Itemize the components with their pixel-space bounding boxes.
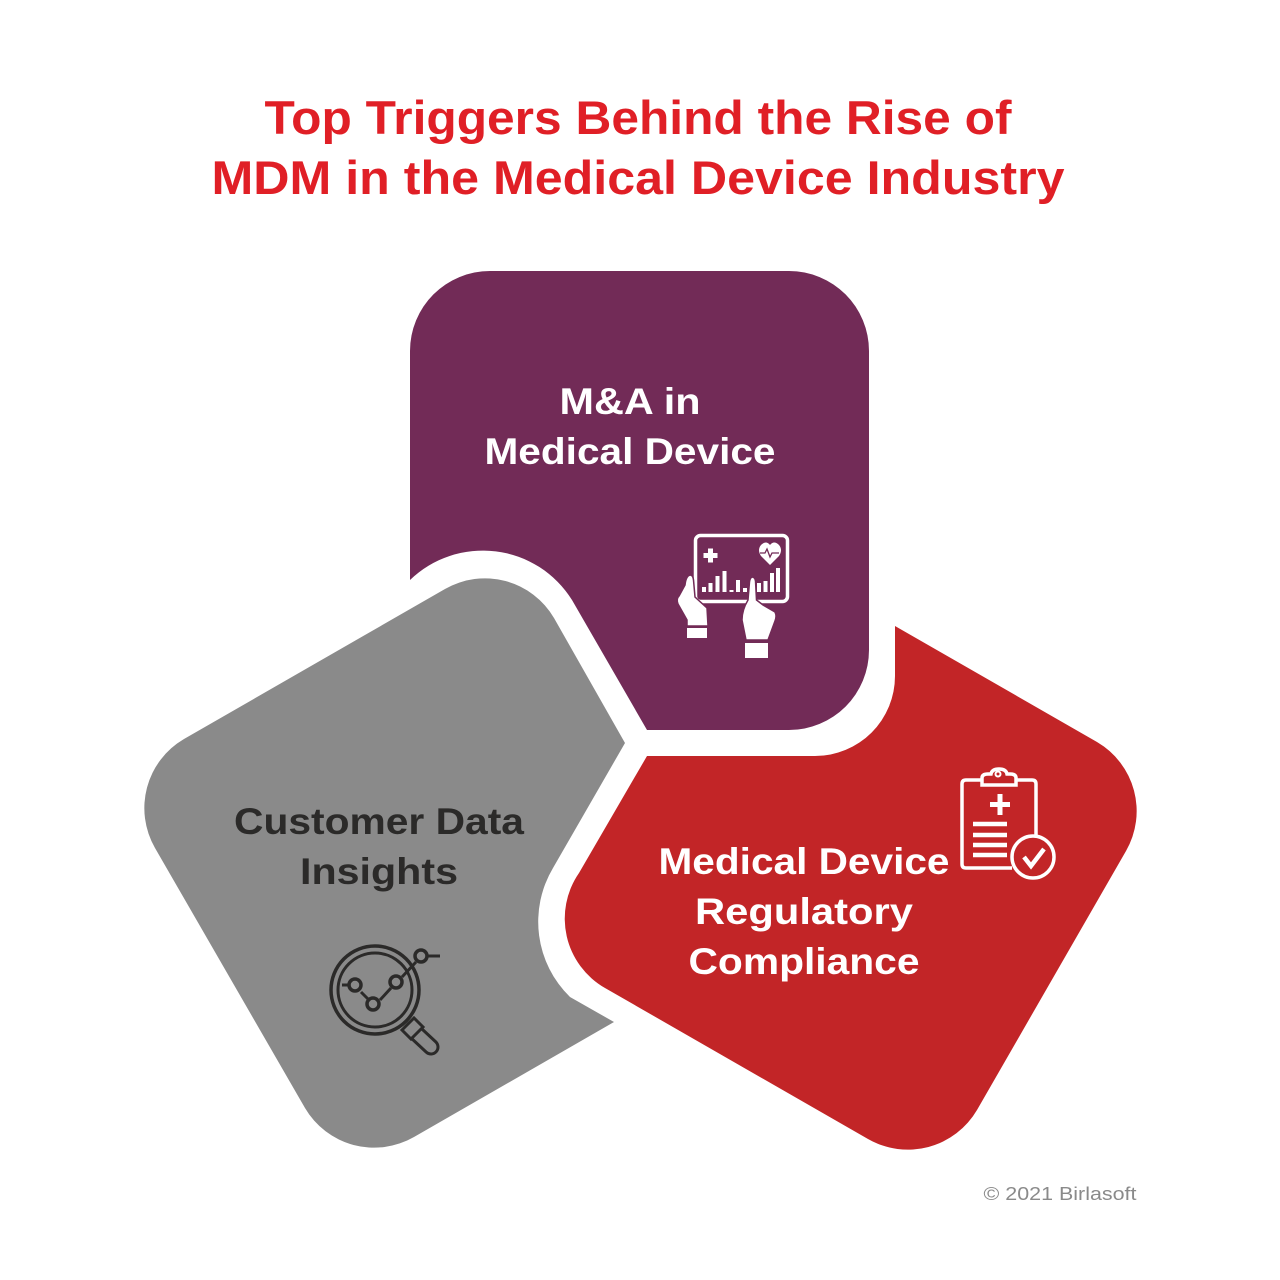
- title: [212, 91, 1064, 204]
- heading: compliance: Medical Device: [658, 841, 950, 882]
- heading: M&A: [484, 381, 776, 472]
- panel: M&A in Medical Device: [410, 271, 869, 730]
- heading: M&A: Medical Device: [484, 431, 776, 472]
- heading: M&A: M&A in: [560, 381, 700, 422]
- icon: magnifier with line chart: [331, 946, 440, 1047]
- heading: customer data: Insights: [300, 851, 458, 892]
- panel: Customer Data Insights: [144, 578, 625, 1148]
- heading: compliance: [658, 841, 950, 982]
- copyright: © 2021 Birlasoft: [984, 1184, 1136, 1204]
- panel: Medical Device Regulatory Compliance: [565, 626, 1137, 1150]
- title: Top Triggers Behind the Rise of: [264, 91, 1012, 144]
- icon: clipboard with check: [962, 769, 1054, 878]
- heading: customer data: Customer Data: [234, 801, 524, 842]
- heading: compliance: Regulatory: [695, 891, 913, 932]
- icon: tablet with hands: [677, 536, 788, 658]
- heading: customer data: [234, 801, 524, 892]
- title: MDM in the Medical Device Industry: [212, 151, 1064, 204]
- heading: compliance: Compliance: [688, 941, 920, 982]
